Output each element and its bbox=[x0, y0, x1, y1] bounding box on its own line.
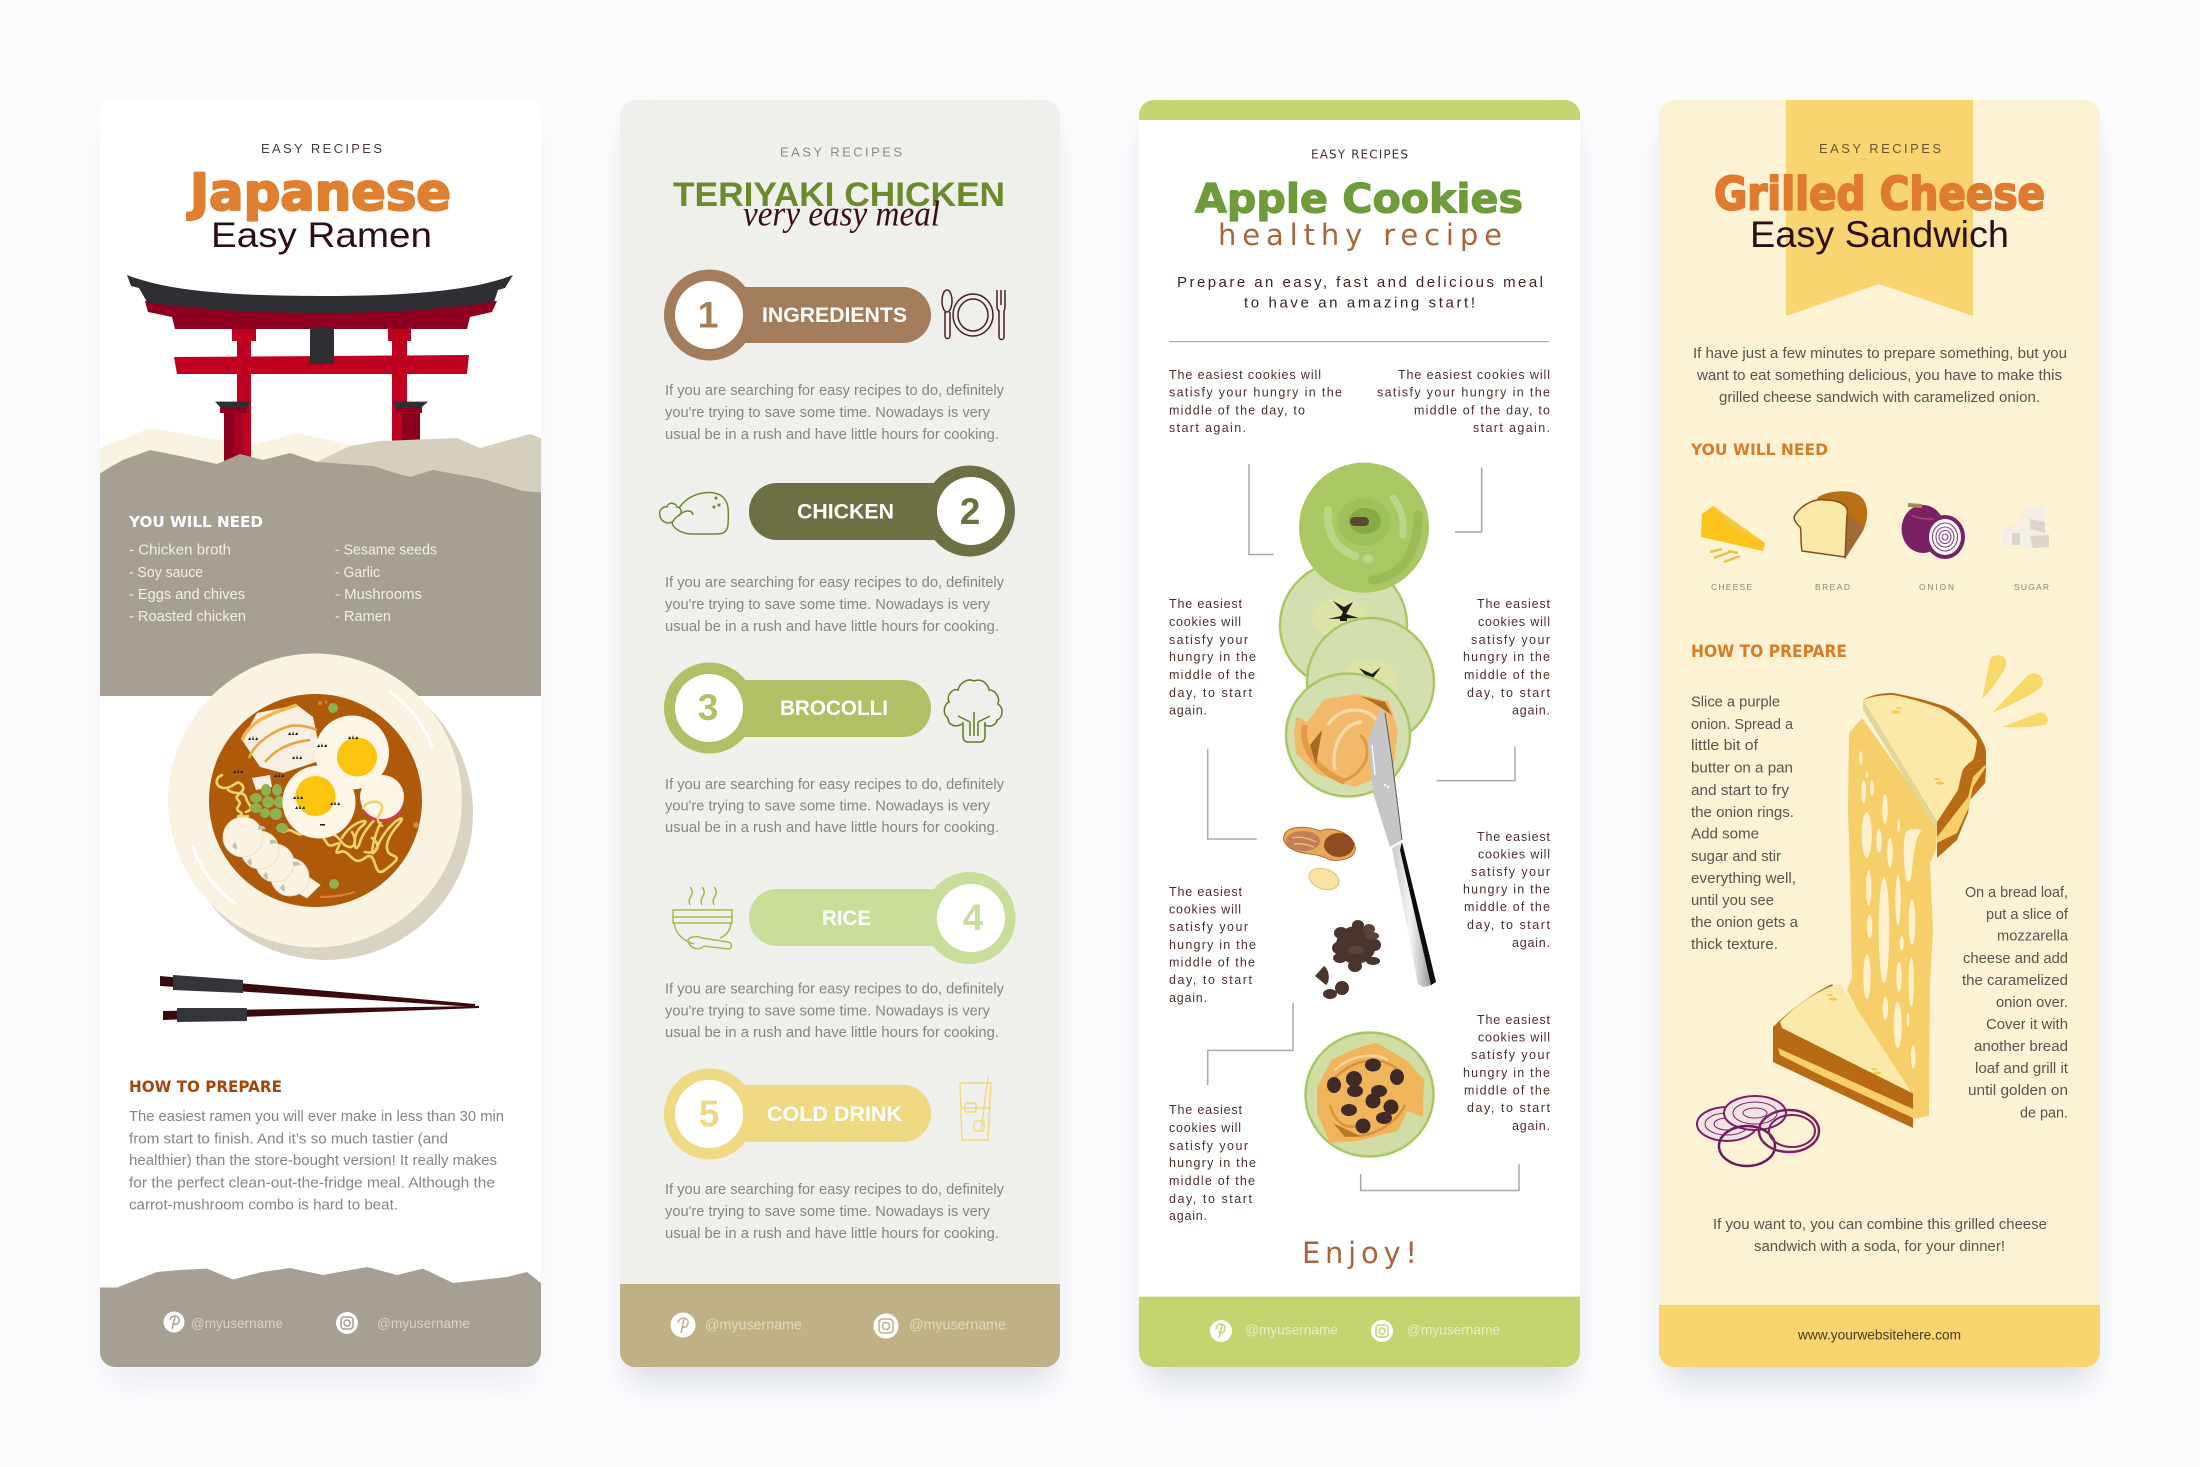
icon: instagram bbox=[1371, 1320, 1393, 1342]
list: ingredients left: - Eggs and chives bbox=[129, 587, 245, 603]
text: note lower left one bbox=[1169, 885, 1256, 1005]
text: note middle left: cookies will bbox=[1169, 615, 1241, 629]
text: note lower left two: hungry in the bbox=[1169, 1156, 1256, 1170]
panel: japanese easy ramen bbox=[100, 100, 541, 1367]
text: note lower left two: middle of the bbox=[1169, 1174, 1255, 1188]
text: note lower left two: again. bbox=[1169, 1209, 1207, 1223]
list: ingredients right: - Garlic bbox=[335, 565, 380, 581]
handle: pinterest: @myusername bbox=[1245, 1322, 1338, 1338]
step 1: ingredients pill: 1 bbox=[698, 294, 718, 336]
text: note middle right: middle of the bbox=[1464, 668, 1550, 682]
text: note middle left: again. bbox=[1169, 704, 1207, 718]
text: step 2: If you are searching for easy recipes to do, definitely bbox=[665, 575, 1005, 591]
text: note middle right: day, to start bbox=[1467, 686, 1551, 700]
step 3: brocolli pill bbox=[664, 662, 931, 754]
step 2: chicken pill: 2 bbox=[960, 491, 980, 532]
illustration: cheese bbox=[1701, 506, 1765, 562]
text: intro: grilled cheese sandwich with caramelized onion. bbox=[1719, 390, 2040, 406]
handle: instagram: @myusername bbox=[909, 1318, 1006, 1334]
text: closing: sandwich with a soda, for your dinner! bbox=[1754, 1239, 2005, 1255]
icon: instagram bbox=[336, 1312, 358, 1334]
text: step 1 bbox=[665, 383, 1005, 443]
text: step 4 bbox=[665, 982, 1005, 1041]
text: note middle left: hungry in the bbox=[1169, 650, 1256, 664]
text: note middle right: satisfy your bbox=[1471, 633, 1550, 647]
footer: grilled cheese card bbox=[1659, 1305, 2100, 1367]
step 3: brocolli pill: 3 bbox=[698, 687, 718, 728]
text: note lower left one: again. bbox=[1169, 991, 1207, 1005]
text: note lower left one: satisfy your bbox=[1169, 920, 1248, 934]
text: preparation right: Cover it with bbox=[1986, 1017, 2068, 1033]
icon: instagram bbox=[874, 1314, 898, 1338]
text: step 5: If you are searching for easy recipes to do, definitely bbox=[665, 1182, 1005, 1198]
footer: apple card bbox=[1139, 1297, 1580, 1368]
text: intro: Prepare an easy, fast and delicious meal bbox=[1177, 274, 1543, 291]
text: note top left bbox=[1169, 368, 1342, 435]
handle: instagram: @myusername bbox=[377, 1315, 470, 1331]
panel: teriyaki chicken bbox=[620, 100, 1060, 1367]
eyebrow: easy recipes: EASY RECIPES bbox=[1311, 148, 1408, 162]
text: preparation right: On a bread loaf, bbox=[1965, 885, 2068, 901]
subtitle: very easy meal: very easy meal bbox=[743, 194, 940, 234]
closing: enjoy: Enjoy! bbox=[1302, 1236, 1417, 1270]
step 4: rice pill: 4 bbox=[963, 897, 984, 938]
list: ingredients left: - Roasted chicken bbox=[129, 609, 246, 625]
text: closing bbox=[1713, 1217, 2047, 1255]
step 2: chicken pill: CHICKEN bbox=[797, 500, 894, 524]
text: note lower left two: cookies will bbox=[1169, 1121, 1241, 1135]
text: note lower left two: day, to start bbox=[1169, 1192, 1253, 1206]
step 5: cold drink pill: 5 bbox=[699, 1094, 719, 1134]
text: note middle left: middle of the bbox=[1169, 668, 1255, 682]
list: ingredients left bbox=[129, 543, 246, 625]
list: ingredients right bbox=[335, 543, 437, 625]
panel: apple cookies bbox=[1139, 100, 1580, 1368]
text: intro: If have just a few minutes to prepare something, but you bbox=[1693, 346, 2067, 362]
text: note top left: start again. bbox=[1169, 421, 1246, 435]
illustration: red onion bbox=[1902, 505, 1965, 559]
step 4: rice pill bbox=[749, 872, 1016, 964]
text: note lower right two: satisfy your bbox=[1471, 1048, 1550, 1062]
text: note lower right one bbox=[1463, 830, 1551, 950]
handle: instagram: @myusername bbox=[1407, 1322, 1500, 1338]
text: preparation left: the onion gets a bbox=[1691, 915, 1799, 931]
text: step 3: If you are searching for easy recipes to do, definitely bbox=[665, 777, 1005, 793]
icon: plate and cutlery bbox=[942, 290, 1005, 340]
text: step 3: you're trying to save some time. Nowadays is very bbox=[665, 798, 991, 814]
text: note lower left one: day, to start bbox=[1169, 973, 1253, 987]
text: note top right: satisfy your hungry in the bbox=[1377, 386, 1550, 400]
title: apple cookies: Apple Cookies bbox=[1195, 176, 1523, 222]
text: preparation left: onion. Spread a bbox=[1691, 717, 1794, 733]
text: note lower left one: hungry in the bbox=[1169, 938, 1256, 952]
text: note middle right: cookies will bbox=[1478, 615, 1550, 629]
text: note lower left one: The easiest bbox=[1169, 885, 1243, 899]
illustration: apple slices and peanut butter bbox=[1280, 562, 1434, 796]
illustration: ramen bowl bbox=[168, 654, 473, 960]
footer: japanese card bbox=[100, 1267, 541, 1367]
text: step 4: If you are searching for easy recipes to do, definitely bbox=[665, 982, 1005, 998]
text: note middle left bbox=[1169, 597, 1256, 718]
text: preparation right: until golden on bbox=[1968, 1083, 2068, 1099]
text: note middle left: satisfy your bbox=[1169, 633, 1248, 647]
label: onion: ONION bbox=[1919, 582, 1954, 592]
icon: cold drink glass bbox=[960, 1077, 991, 1140]
illustration: chocolate chips bbox=[1315, 920, 1381, 999]
text: step 4: usual be in a rush and have little hours for cooking. bbox=[665, 1025, 999, 1041]
text: step 5: you're trying to save some time. Nowadays is very bbox=[665, 1204, 991, 1220]
text: note top left: The easiest cookies will bbox=[1169, 368, 1321, 382]
text: step 1: If you are searching for easy recipes to do, definitely bbox=[665, 383, 1005, 399]
heading: how to prepare: HOW TO PREPARE bbox=[1691, 642, 1847, 661]
text: note lower left two: The easiest bbox=[1169, 1103, 1243, 1117]
text: note lower right one: cookies will bbox=[1478, 848, 1550, 862]
illustration: finished cookie bbox=[1306, 1032, 1434, 1156]
text: preparation left: butter on a pan bbox=[1691, 761, 1793, 777]
text: note middle left: day, to start bbox=[1169, 686, 1253, 700]
text: closing: If you want to, you can combine this grilled cheese bbox=[1713, 1217, 2047, 1233]
label: bread: BREAD bbox=[1815, 582, 1850, 592]
text: note lower left two bbox=[1169, 1103, 1256, 1223]
icon: broccoli bbox=[944, 680, 1002, 742]
illustration: bread bbox=[1794, 491, 1867, 559]
text: preparation left: until you see bbox=[1691, 893, 1774, 909]
text: note lower right two: middle of the bbox=[1464, 1084, 1550, 1098]
text: note lower right two: again. bbox=[1512, 1119, 1550, 1133]
text: preparation bbox=[129, 1109, 504, 1214]
text: note lower right one: middle of the bbox=[1464, 900, 1550, 914]
text: note lower left one: cookies will bbox=[1169, 903, 1241, 917]
text: website: www.yourwebsitehere.com bbox=[1797, 1327, 1961, 1342]
text: note top right: start again. bbox=[1473, 421, 1550, 435]
text: step 3 bbox=[665, 777, 1005, 836]
text: note top left: middle of the day, to bbox=[1169, 404, 1305, 418]
icon: pinterest bbox=[164, 1312, 184, 1332]
label: cheese: CHEESE bbox=[1711, 582, 1752, 592]
text: note lower left two: satisfy your bbox=[1169, 1139, 1248, 1153]
text: intro bbox=[1177, 274, 1543, 312]
ribbon banner bbox=[1786, 100, 1973, 316]
illustration: knife bbox=[1368, 708, 1436, 987]
text: preparation right: the caramelized bbox=[1962, 973, 2068, 989]
eyebrow: easy recipes: EASY RECIPES bbox=[1819, 141, 1941, 156]
step 1: ingredients pill: INGREDIENTS bbox=[762, 303, 907, 327]
text: preparation left: everything well, bbox=[1691, 871, 1796, 887]
step 4: rice pill: RICE bbox=[822, 906, 871, 930]
list: ingredients right: - Ramen bbox=[335, 609, 391, 625]
icon: rice bowl bbox=[673, 887, 732, 949]
text: preparation left: sugar and stir bbox=[1691, 849, 1781, 865]
icon: pinterest bbox=[670, 1312, 696, 1338]
heading: how to prepare: HOW TO PREPARE bbox=[129, 1077, 282, 1096]
eyebrow: easy recipes: EASY RECIPES bbox=[261, 141, 382, 156]
illustration: onion rings bbox=[1697, 1096, 1819, 1166]
text: note lower right one: hungry in the bbox=[1463, 882, 1550, 896]
text: note lower left one: middle of the bbox=[1169, 956, 1255, 970]
list: ingredients right: - Sesame seeds bbox=[335, 543, 437, 559]
text: preparation: healthier) than the store-bought version! It really makes bbox=[129, 1153, 497, 1169]
text: note lower right one: The easiest bbox=[1477, 830, 1551, 844]
text: preparation left bbox=[1691, 694, 1799, 953]
text: note top right bbox=[1377, 368, 1550, 435]
subtitle: healthy recipe: healthy recipe bbox=[1218, 218, 1502, 252]
connector lines bbox=[1208, 464, 1519, 1190]
text: note middle right: again. bbox=[1512, 704, 1550, 718]
text: intro: to have an amazing start! bbox=[1244, 294, 1475, 312]
text: note lower right one: satisfy your bbox=[1471, 865, 1550, 879]
text: preparation left: and start to fry bbox=[1691, 783, 1790, 799]
title: japanese: Japanese bbox=[187, 164, 451, 223]
panel: you will need band bbox=[100, 450, 541, 696]
text: step 4: you're trying to save some time. Nowadays is very bbox=[665, 1004, 991, 1020]
text: preparation: from start to finish. And it’s so much tastier (and bbox=[129, 1132, 448, 1148]
text: step 1: you're trying to save some time. Nowadays is very bbox=[665, 405, 991, 421]
text: step 1: usual be in a rush and have little hours for cooking. bbox=[665, 427, 999, 443]
list: ingredients left: - Soy sauce bbox=[129, 565, 203, 581]
text: note lower right two: day, to start bbox=[1467, 1101, 1551, 1115]
text: intro: want to eat something delicious, you have to make this bbox=[1696, 368, 2062, 384]
text: step 2 bbox=[665, 575, 1005, 635]
text: step 5: usual be in a rush and have little hours for cooking. bbox=[665, 1226, 999, 1242]
text: step 3: usual be in a rush and have little hours for cooking. bbox=[665, 820, 999, 836]
text: preparation left: the onion rings. bbox=[1691, 805, 1794, 821]
step 5: cold drink pill bbox=[664, 1068, 931, 1160]
handle: pinterest: @myusername bbox=[705, 1318, 802, 1334]
subtitle: easy sandwich: Easy Sandwich bbox=[1750, 214, 2009, 255]
illustration: torii gate bbox=[127, 275, 513, 463]
text: note lower right one: again. bbox=[1512, 936, 1550, 950]
illustration: peanuts bbox=[1284, 827, 1355, 893]
text: note lower right two bbox=[1463, 1013, 1551, 1133]
text: note middle right: hungry in the bbox=[1463, 650, 1550, 664]
title: grilled cheese: Grilled Cheese bbox=[1714, 168, 2045, 221]
title: teriyaki chicken: TERIYAKI CHICKEN bbox=[673, 176, 1005, 214]
text: note top right: middle of the day, to bbox=[1414, 404, 1550, 418]
illustration: spark rays bbox=[1982, 655, 2048, 727]
text: preparation left: thick texture. bbox=[1691, 937, 1778, 953]
text: preparation: carrot-mushroom combo is hard to beat. bbox=[129, 1198, 398, 1214]
label: sugar: SUGAR bbox=[2014, 582, 2049, 592]
text: note top left: satisfy your hungry in the bbox=[1169, 386, 1342, 400]
text: preparation: The easiest ramen you will ever make in less than 30 min bbox=[129, 1109, 504, 1125]
text: preparation right: onion over. bbox=[1996, 995, 2068, 1011]
text: preparation right: mozzarella bbox=[1997, 929, 2069, 945]
illustration: beige hills bbox=[317, 434, 541, 492]
text: note lower right two: cookies will bbox=[1478, 1030, 1550, 1044]
text: preparation right: cheese and add bbox=[1963, 951, 2068, 967]
text: preparation left: Slice a purple bbox=[1691, 694, 1780, 710]
step 5: cold drink pill: COLD DRINK bbox=[767, 1102, 902, 1126]
illustration: chopsticks bbox=[160, 975, 479, 1022]
step 1: ingredients pill bbox=[664, 270, 931, 360]
text: note middle right: The easiest bbox=[1477, 597, 1551, 611]
text: preparation right: de pan. bbox=[2020, 1106, 2068, 1122]
icon: pinterest bbox=[1210, 1320, 1232, 1342]
illustration: whole green apple bbox=[1299, 463, 1429, 593]
heading: you will need: YOU WILL NEED bbox=[128, 513, 263, 531]
text: note lower right one: day, to start bbox=[1467, 918, 1551, 932]
step 3: brocolli pill: BROCOLLI bbox=[780, 696, 888, 720]
text: step 2: usual be in a rush and have little hours for cooking. bbox=[665, 619, 999, 635]
footer: teriyaki card bbox=[620, 1284, 1060, 1367]
text: preparation: for the perfect clean-out-the-fridge meal. Although the bbox=[129, 1175, 495, 1191]
heading: you will need: YOU WILL NEED bbox=[1690, 440, 1828, 459]
text: preparation right: another bread bbox=[1974, 1039, 2068, 1055]
text: preparation right: put a slice of bbox=[1986, 907, 2069, 923]
text: preparation right: loaf and grill it bbox=[1975, 1061, 2068, 1077]
illustration: sugar cubes bbox=[2002, 506, 2049, 549]
text: preparation left: little bit of bbox=[1691, 738, 1759, 754]
illustration: melted grilled cheese sandwich bbox=[1773, 693, 1986, 1128]
subtitle: easy ramen: Easy Ramen bbox=[211, 216, 432, 255]
icon: raw chicken bbox=[660, 493, 728, 534]
text: preparation left: Add some bbox=[1691, 827, 1759, 843]
list: ingredients right: - Mushrooms bbox=[335, 587, 422, 603]
handle: pinterest: @myusername bbox=[191, 1315, 283, 1331]
illustration: cream hills bbox=[100, 428, 355, 474]
text: step 2: you're trying to save some time. Nowadays is very bbox=[665, 597, 991, 613]
step 2: chicken pill bbox=[749, 466, 1015, 556]
text: intro bbox=[1693, 346, 2067, 406]
text: note middle right bbox=[1463, 597, 1551, 718]
list: ingredients left: - Chicken broth bbox=[129, 543, 231, 559]
eyebrow: easy recipes: EASY RECIPES bbox=[780, 144, 902, 160]
text: step 5 bbox=[665, 1182, 1005, 1242]
text: preparation right bbox=[1962, 885, 2069, 1122]
panel: grilled cheese bbox=[1659, 100, 2100, 1367]
text: note lower right two: The easiest bbox=[1477, 1013, 1551, 1027]
text: note middle left: The easiest bbox=[1169, 597, 1243, 611]
text: note top right: The easiest cookies will bbox=[1398, 368, 1550, 382]
text: note lower right two: hungry in the bbox=[1463, 1066, 1550, 1080]
